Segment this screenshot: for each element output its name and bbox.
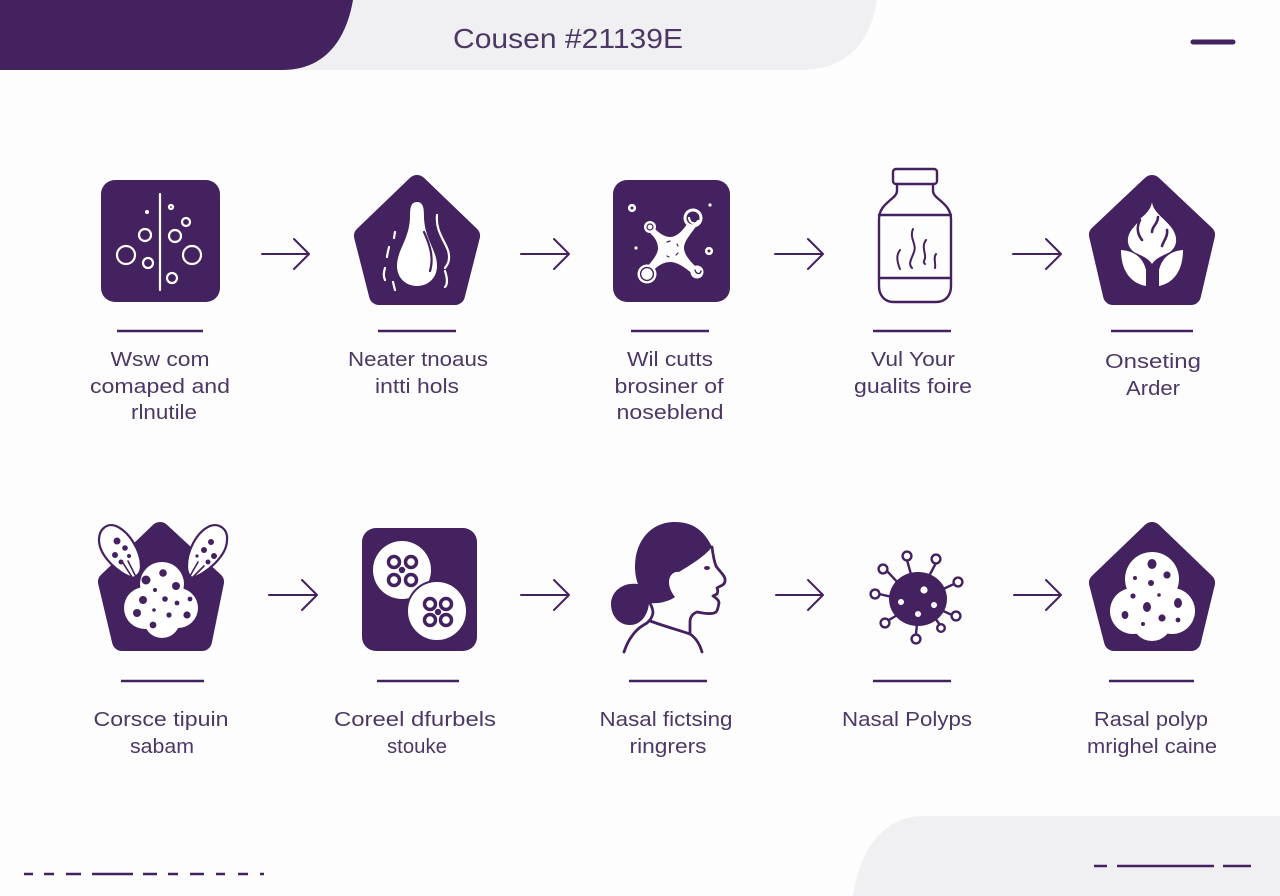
- label: [90, 349, 230, 424]
- panel: step 3: [613, 180, 730, 424]
- arrow 3: [775, 239, 823, 269]
- label: rlnutile: [131, 402, 197, 424]
- label: Rasal polyp: [1094, 709, 1208, 731]
- label: Nasal fictsing: [600, 709, 732, 731]
- footer panel: [853, 816, 1280, 896]
- label: [348, 349, 488, 398]
- label: gualits foire: [854, 376, 972, 398]
- label: ringrers: [630, 736, 706, 758]
- label: Wil cutts: [627, 349, 713, 371]
- arrow 1: [262, 239, 309, 269]
- label: stouke: [387, 736, 447, 758]
- label: Neater tnoaus: [348, 349, 488, 371]
- arrow 4: [1013, 239, 1061, 269]
- label: Wsw com: [110, 349, 210, 371]
- icon: square with bubbles: [101, 180, 220, 302]
- panel: step 6: [94, 525, 228, 758]
- label: Nasal Polyps: [842, 709, 972, 731]
- label: Corsce tipuin: [94, 709, 228, 731]
- label: sabam: [130, 736, 194, 758]
- arrow 6: [521, 580, 569, 610]
- label: [1087, 709, 1217, 758]
- title: Cousen #21139E: [453, 23, 683, 54]
- panel: step 7: [334, 528, 496, 758]
- label: [854, 349, 972, 398]
- panel: step 8: [600, 522, 732, 758]
- icon: square with two cells: [362, 528, 477, 651]
- label: comaped and: [90, 376, 230, 398]
- panel: step 10: [1087, 532, 1217, 758]
- footer dashes right: [1094, 865, 1251, 867]
- panel: step 1: [90, 180, 230, 424]
- panel: step 4: [854, 169, 972, 398]
- panel: step 2: [348, 185, 488, 398]
- label: Onseting: [1105, 351, 1201, 373]
- label: [1105, 351, 1201, 400]
- icon: spotted cluster with ears: [99, 525, 227, 641]
- label: mrighel caine: [1087, 736, 1217, 758]
- panel: step 9: [842, 552, 972, 731]
- label: noseblend: [616, 402, 724, 424]
- icon: pentagon with flame and leaves: [1099, 185, 1205, 295]
- menu dash: [1193, 40, 1233, 44]
- arrow 7: [776, 580, 823, 610]
- label: [600, 709, 732, 758]
- arrow 8: [1014, 580, 1061, 610]
- arrow 5: [269, 580, 317, 610]
- panel: step 5: [1099, 185, 1205, 400]
- header band: [0, 0, 877, 70]
- label: [334, 709, 496, 758]
- label: [614, 349, 724, 424]
- icon: person profile: [611, 522, 725, 652]
- label: Coreel dfurbels: [334, 709, 496, 731]
- label: intti hols: [375, 376, 459, 398]
- icon: bottle: [879, 169, 951, 302]
- icon: square with molecule: [613, 180, 730, 302]
- icon: virus: [871, 552, 962, 643]
- icon: pentagon with drop: [364, 185, 470, 295]
- icon: pentagon with polyp cluster: [1099, 532, 1205, 641]
- label: brosiner of: [614, 376, 724, 398]
- arrow 2: [521, 239, 569, 269]
- footer dashes left: [24, 873, 264, 875]
- label: [94, 709, 228, 758]
- label: Arder: [1126, 378, 1180, 400]
- label: Vul Your: [871, 349, 955, 371]
